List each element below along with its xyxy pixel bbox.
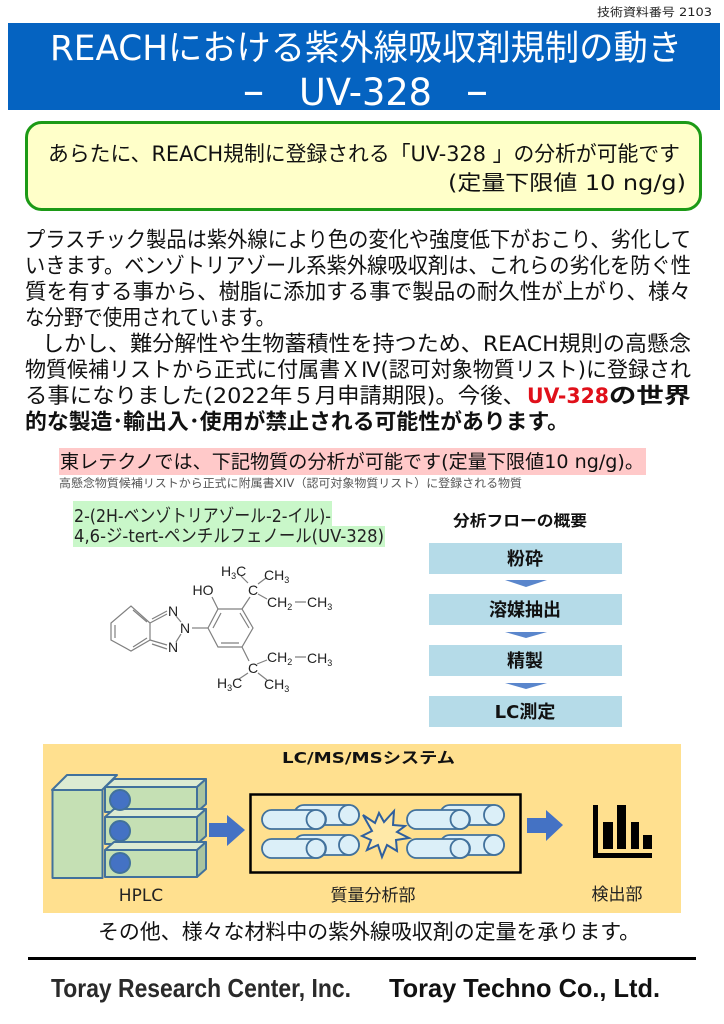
chemical structure: N bbox=[168, 639, 178, 655]
icon: detector bar chart bbox=[593, 805, 652, 858]
chemical structure: CH bbox=[307, 594, 327, 610]
body text: る事になりました(2022年５月申請期限)。今後、 bbox=[25, 384, 525, 409]
step: grinding: 粉砕 bbox=[507, 549, 543, 570]
title banner: REACHにおける紫外線吸収剤規制の動き bbox=[50, 29, 682, 69]
body text: いきます。ベンゾトリアゾール系紫外線吸収剤は、これらの劣化を防ぐ性 bbox=[25, 254, 691, 279]
mass analyzer frame bbox=[250, 794, 520, 872]
chemical structure: C bbox=[232, 675, 242, 691]
chemical structure: H bbox=[221, 563, 231, 579]
callout: analysis now available: あらたに、REACH規制に登録される「UV-328 」の分析が可能です bbox=[48, 142, 680, 166]
chemical structure: CH bbox=[267, 594, 287, 610]
step: purification: 精製 bbox=[507, 651, 543, 672]
highlighted statement: 東レテクノでは、下記物質の分析が可能です(定量下限値10 ng/g)。 bbox=[60, 451, 644, 473]
footer: company names: Toray Research Center, Inc. bbox=[51, 973, 351, 1003]
chemical structure: C bbox=[248, 660, 258, 676]
body text: UV-328 bbox=[527, 384, 609, 409]
icon: collision burst bbox=[362, 811, 409, 857]
footer: company names: Toray Techno Co., Ltd. bbox=[389, 973, 660, 1003]
document number: 技術資料番号 2103 bbox=[597, 5, 712, 19]
arrow 2 bbox=[505, 632, 547, 638]
chemical structure: H bbox=[217, 675, 227, 691]
step: solvent extraction: 溶媒抽出 bbox=[489, 600, 561, 621]
callout: analysis now available: (定量下限値 10 ng/g) bbox=[448, 171, 686, 195]
callout: analysis now available bbox=[26, 122, 700, 210]
chemical structure: 3 bbox=[231, 571, 236, 581]
chemical structure: 3 bbox=[284, 575, 289, 585]
panel: LC/MS/MS system bbox=[43, 744, 681, 913]
arrow 3 bbox=[505, 683, 547, 689]
compound name: 2-(2H-ベンゾトリアゾール-2-イル)- bbox=[74, 506, 331, 527]
label: HPLC: HPLC bbox=[119, 886, 163, 906]
body text: 物質候補リストから正式に付属書ＸⅣ(認可対象物質リスト)に登録され bbox=[25, 358, 691, 383]
arrow 1 bbox=[505, 580, 547, 587]
chemical structure: CH bbox=[267, 649, 287, 665]
closing note: その他、様々な材料中の紫外線吸収剤の定量を承ります。 bbox=[98, 920, 640, 944]
title banner: − bbox=[465, 71, 489, 114]
step: LC measurement: LC測定 bbox=[495, 702, 555, 723]
compound name bbox=[73, 501, 385, 547]
arrow: HPLC to mass spec bbox=[209, 815, 245, 846]
icon: HPLC bbox=[52, 775, 206, 878]
chemical structure bbox=[111, 563, 332, 694]
chemical structure: CH bbox=[264, 567, 284, 583]
body text: 的な製造･輸出入･使用が禁止される可能性があります。 bbox=[25, 409, 569, 435]
chemical structure: 3 bbox=[327, 658, 332, 668]
chemical structure: N bbox=[180, 620, 190, 636]
step: purification bbox=[429, 645, 622, 676]
body text: の世界 bbox=[609, 384, 691, 409]
compound name: 4,6-ジ-tert-ペンチルフェノール(UV-328) bbox=[74, 526, 384, 547]
chemical structure: 2 bbox=[287, 657, 292, 667]
body text: な分野で使用されています。 bbox=[25, 306, 275, 331]
title banner bbox=[8, 23, 720, 114]
chemical structure: 3 bbox=[284, 684, 289, 694]
flow heading: 分析フローの概要 bbox=[453, 511, 587, 530]
title banner: UV-328 bbox=[299, 71, 432, 114]
body text: しかし、難分解性や生物蓄積性を持つため、REACH規則の高懸念 bbox=[42, 332, 691, 357]
sub note: 高懸念物質候補リストから正式に附属書XIV（認可対象物質リスト）に登録される物質 bbox=[59, 476, 522, 490]
body text: プラスチック製品は紫外線により色の変化や強度低下がおこり、劣化して bbox=[25, 228, 691, 253]
title banner: − bbox=[242, 71, 265, 114]
chemical structure: N bbox=[168, 603, 178, 619]
label: mass analyzer: 質量分析部 bbox=[330, 886, 416, 906]
chemical structure: C bbox=[236, 563, 246, 579]
body text: 質を有する事から、樹脂に添加する事で製品の耐久性が上がり、様々 bbox=[25, 280, 691, 305]
body text bbox=[25, 228, 691, 435]
step: solvent extraction bbox=[429, 594, 622, 625]
icon: quadrupole cylinders bbox=[262, 805, 504, 858]
arrow: mass spec to detector bbox=[527, 810, 563, 841]
chemical structure: 3 bbox=[227, 683, 232, 693]
chemical structure: CH bbox=[264, 676, 284, 692]
label: detector: 検出部 bbox=[592, 885, 642, 905]
footer: company names bbox=[51, 973, 660, 1003]
step: grinding bbox=[429, 543, 622, 574]
analysis flow bbox=[429, 511, 622, 727]
panel heading: LC/MS/MSシステム bbox=[282, 749, 455, 767]
chemical structure: 2 bbox=[287, 602, 292, 612]
step: LC measurement bbox=[429, 696, 622, 727]
chemical structure: CH bbox=[307, 650, 327, 666]
chemical structure: C bbox=[248, 582, 258, 598]
chemical structure: 3 bbox=[327, 602, 332, 612]
chemical structure: HO bbox=[192, 582, 214, 598]
